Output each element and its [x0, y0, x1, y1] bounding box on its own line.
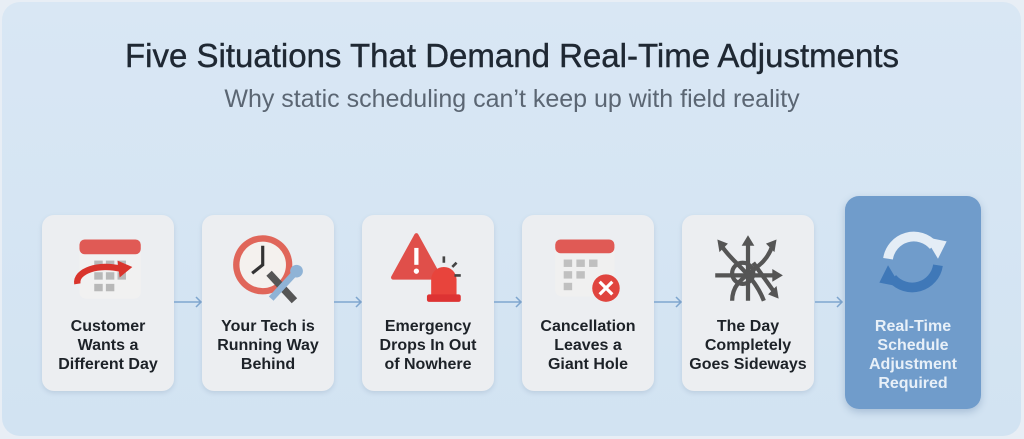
card: customer wants different day: Wants a: [78, 337, 138, 354]
card: emergency: Drops In Out: [380, 337, 476, 354]
card: customer wants different day: Customer: [71, 318, 145, 335]
card: emergency: of Nowhere: [384, 356, 472, 373]
icon: calendar with x: [555, 240, 620, 302]
card: day goes sideways: [682, 215, 814, 391]
icon: calendar with arrow: [74, 240, 141, 292]
icon: tangled arrows: [715, 235, 783, 302]
card: tech running behind: Your Tech is: [221, 318, 315, 335]
arrow: [174, 296, 202, 308]
card: day goes sideways: Goes Sideways: [689, 356, 807, 373]
card: day goes sideways: Completely: [705, 337, 791, 354]
card: tech running behind: Running Way: [217, 337, 319, 354]
card: tech running behind: [202, 215, 334, 391]
card: cancellation: Leaves a: [554, 337, 622, 354]
card: emergency: Emergency: [385, 318, 471, 335]
card: cancellation: Cancellation: [540, 318, 636, 335]
card: emergency: [362, 215, 494, 391]
final card: real-time adjustment: Adjustment: [869, 356, 957, 373]
final card: real-time adjustment: Schedule: [877, 337, 949, 354]
arrow: [815, 296, 843, 308]
title: Five Situations That Demand Real-Time Adjustments: [125, 37, 899, 74]
icon: refresh arrows: [880, 232, 946, 292]
card: customer wants different day: [42, 215, 174, 391]
card: cancellation: [522, 215, 654, 391]
card: tech running behind: Behind: [241, 356, 295, 373]
final card: real-time adjustment: Real-Time: [875, 318, 951, 335]
final card: real-time adjustment: Required: [878, 375, 948, 392]
card: customer wants different day: Different Day: [58, 356, 158, 373]
arrow: [334, 296, 362, 308]
icon: clock with wrench: [233, 235, 303, 304]
subtitle: Why static scheduling can’t keep up with field reality: [224, 85, 800, 113]
card: cancellation: Giant Hole: [548, 356, 628, 373]
arrow: [494, 296, 522, 308]
arrow: [654, 296, 682, 308]
icon: warning and siren: [391, 233, 461, 302]
final card: real-time adjustment: [845, 196, 981, 409]
card: day goes sideways: The Day: [717, 318, 779, 335]
